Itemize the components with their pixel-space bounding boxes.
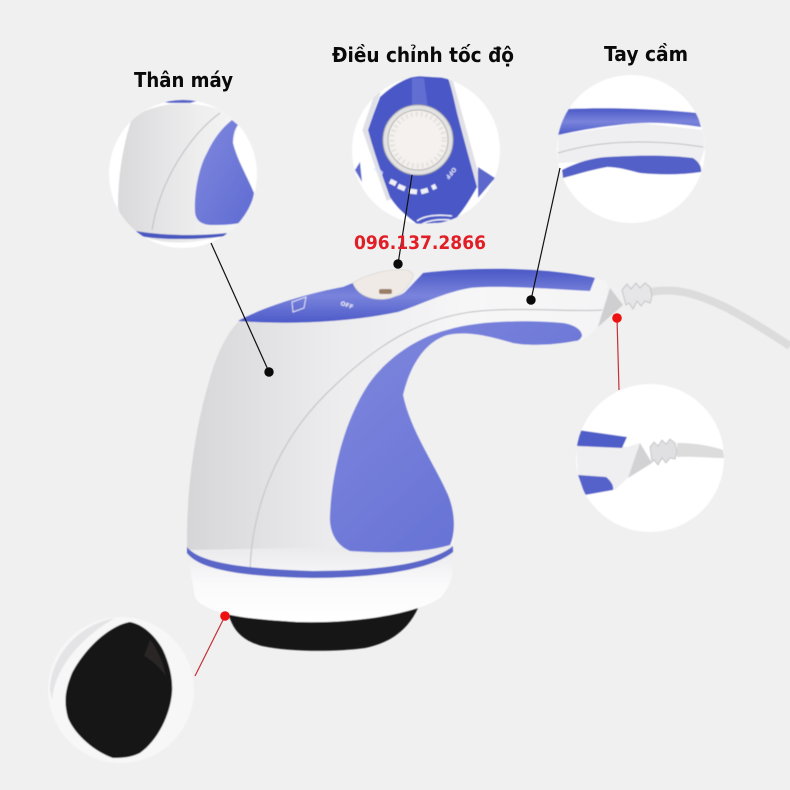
knob base glint — [379, 289, 392, 294]
body seam — [250, 309, 602, 570]
handle end — [576, 443, 640, 490]
grey strips — [365, 76, 480, 200]
detail circle: black pad — [50, 620, 173, 758]
speed marks — [390, 181, 436, 192]
knob face — [388, 110, 448, 170]
upper blue — [577, 430, 627, 448]
pad surface — [65, 622, 172, 758]
knob silver ring — [383, 105, 453, 175]
detail circle: speed control — [352, 76, 500, 224]
main body — [187, 269, 608, 550]
knob serration — [392, 114, 444, 166]
detail circle: body — [109, 100, 257, 248]
left blue triangle — [355, 162, 362, 182]
upper blue — [558, 108, 701, 135]
blue panel — [368, 76, 477, 224]
white handle band — [558, 123, 705, 163]
black pad — [228, 608, 418, 651]
OFF label: OFF — [443, 166, 457, 180]
logo mark — [292, 297, 306, 312]
right blue triangle — [478, 167, 495, 198]
ON label: ON — [373, 165, 385, 177]
power cable — [650, 290, 790, 346]
logo fragment — [417, 215, 452, 224]
body side blue grip — [330, 321, 582, 552]
phone number: 096.137.2866 — [354, 232, 486, 254]
blue grip — [195, 120, 254, 225]
massager device — [187, 269, 790, 651]
pointer: speed control — [393, 175, 412, 269]
pointer: black pad — [195, 611, 230, 676]
grey joint — [628, 443, 652, 478]
base section — [187, 545, 453, 622]
detail circle: cable — [576, 384, 724, 532]
handle seam — [558, 142, 703, 153]
strain relief — [650, 439, 677, 465]
pad highlight — [144, 640, 166, 676]
pointer: handle — [526, 168, 560, 305]
pointer: cable — [612, 313, 622, 390]
OFF mark: OFF — [339, 300, 354, 311]
heading: body: Thân máy — [134, 68, 233, 92]
top blue edge — [163, 100, 197, 103]
cable stub — [677, 443, 724, 458]
panel highlight — [412, 78, 428, 106]
cable joint — [598, 288, 623, 327]
lower blue — [562, 156, 701, 178]
top blue panel — [238, 269, 595, 323]
body piece — [118, 103, 236, 242]
base ring — [187, 546, 453, 578]
cable strain relief — [622, 283, 652, 309]
seam — [152, 113, 220, 230]
heading: handle: Tay cầm — [604, 42, 688, 66]
pointer: body — [211, 243, 274, 377]
blue band — [136, 231, 227, 239]
heading: speed control: Điều chỉnh tốc độ — [332, 43, 514, 67]
speed knob — [353, 270, 413, 299]
lower blue — [578, 475, 613, 495]
rim shade — [50, 618, 115, 700]
detail circle: handle — [557, 75, 705, 223]
